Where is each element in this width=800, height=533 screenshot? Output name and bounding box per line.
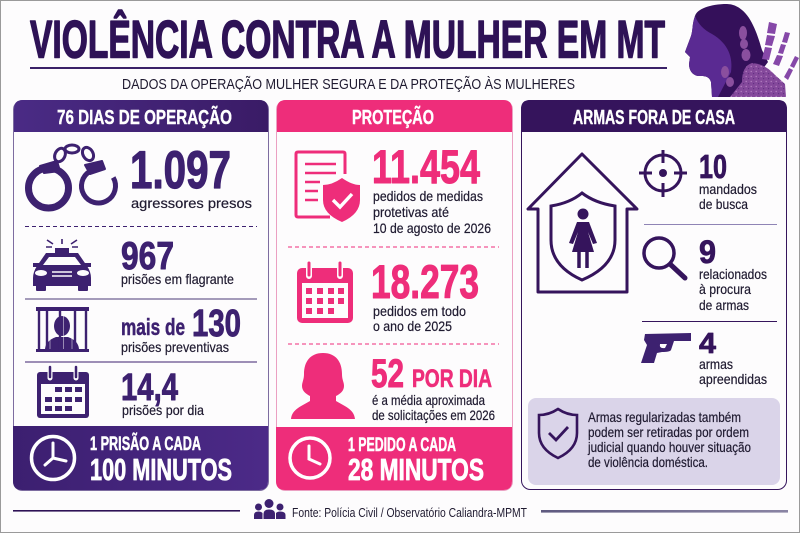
stat: 52 por dia: 52: [371, 352, 404, 396]
stat: 52 por dia: é a média aproximada: [372, 392, 485, 408]
stat: 11.454: protetivas até: [373, 204, 449, 220]
icon: prisoner behind bars: [36, 307, 89, 352]
panel header: 76 DIAS DE OPERAÇÃO: [57, 106, 232, 129]
callout: 1 pedido a cada 28 minutos: 28 MINUTOS: [348, 452, 484, 487]
icon: handcuffs: [28, 145, 122, 209]
illustration: woman profile with handprint: [685, 4, 799, 97]
callout: 1 prisão a cada 100 minutos: 100 MINUTOS: [90, 452, 232, 487]
stat: 52 por dia: POR DIA: [412, 365, 492, 393]
footer source: Fonte: Polícia Civil / Observatório Caliandra-MPMT: [292, 506, 527, 520]
stat: 18.273: pedidos em todo: [373, 303, 466, 319]
stat: 52 por dia: de solicitações em 2026: [372, 407, 495, 423]
stat: 967: [121, 235, 234, 287]
stat: mais de 130: [121, 303, 241, 355]
stat: 18.273: o ano de 2025: [373, 318, 452, 334]
stat: 18.273: 18.273: [371, 255, 479, 308]
footer source: [13, 499, 788, 520]
stat: 1.097: agressores presos: [131, 195, 252, 211]
stat: 9: à procura: [699, 281, 751, 297]
callout: armas regularizadas: de violência doméstica.: [588, 454, 708, 470]
callout: 1 prisão a cada 100 minutos: [13, 426, 268, 490]
stat: 9: de armas: [699, 297, 749, 313]
icon: woman silhouette: [291, 353, 355, 419]
icon: police car: [33, 239, 91, 291]
stat: 1.097: 1.097: [130, 141, 231, 200]
callout: 1 pedido a cada 28 minutos: [276, 427, 512, 490]
stat: 52 por dia: [371, 352, 495, 423]
stat: mais de 130: 130: [192, 303, 241, 345]
panel header: [14, 100, 268, 132]
stat: 9: 9: [699, 234, 716, 270]
panel header: [521, 100, 787, 132]
icon: document with shield: [296, 152, 360, 222]
panel header: ARMAS FORA DE CASA: [573, 107, 735, 129]
stat: 18.273: [371, 255, 479, 334]
stat: 4: 4: [699, 328, 716, 360]
stat: 14,4: prisões por dia: [122, 402, 204, 418]
callout: armas regularizadas: [528, 398, 780, 485]
panel header: [277, 100, 512, 132]
icon: people: [254, 499, 286, 519]
callout: armas regularizadas: podem ser retiradas por ordem: [588, 424, 749, 440]
panel header: PROTEÇÃO: [352, 106, 434, 129]
icon: pistol: [641, 333, 691, 363]
stat: 10: [699, 148, 757, 212]
stat: 967: prisões em flagrante: [121, 271, 234, 287]
icon: calendar: [37, 367, 89, 418]
icon: calendar: [297, 263, 353, 323]
stat: 10: 10: [699, 148, 727, 185]
stat: 4: armas: [699, 356, 733, 372]
stat: mais de 130: prisões preventivas: [121, 339, 229, 355]
stat: 11.454: 10 de agosto de 2026: [373, 220, 491, 236]
callout: armas regularizadas: Armas regularizadas também: [588, 409, 741, 425]
stat: 4: apreendidas: [699, 371, 767, 387]
stat: 11.454: pedidos de medidas: [373, 188, 483, 204]
callout: 1 prisão a cada 100 minutos: 1 PRISÃO A CADA: [90, 433, 201, 455]
icon: crosshair: [639, 150, 687, 197]
stat: 9: [699, 234, 767, 313]
subtitle: DADOS DA OPERAÇÃO MULHER SEGURA E DA PROTEÇÃO ÀS MULHERES: [122, 76, 575, 93]
panel: proteção: [276, 100, 512, 490]
icon: house with shielded woman: [528, 154, 637, 292]
icon: magnifier: [644, 238, 685, 278]
callout: armas regularizadas: judicial quando houver situação: [587, 439, 751, 455]
panel: armas fora de casa: [521, 100, 787, 490]
stat: 4: [699, 328, 767, 387]
stat: 11.454: [372, 140, 491, 236]
stat: 14,4: 14,4: [121, 367, 178, 409]
stat: 10: de busca: [699, 196, 748, 212]
stat: 967: 967: [121, 235, 174, 278]
stat: 11.454: 11.454: [372, 140, 480, 193]
panel: 76 dias de operação: [13, 100, 268, 490]
callout: 1 pedido a cada 28 minutos: 1 PEDIDO A CADA: [348, 435, 456, 456]
stat: 10: mandados: [699, 181, 757, 197]
stat: mais de 130: mais de: [121, 314, 185, 340]
stat: 9: relacionados: [699, 266, 767, 282]
